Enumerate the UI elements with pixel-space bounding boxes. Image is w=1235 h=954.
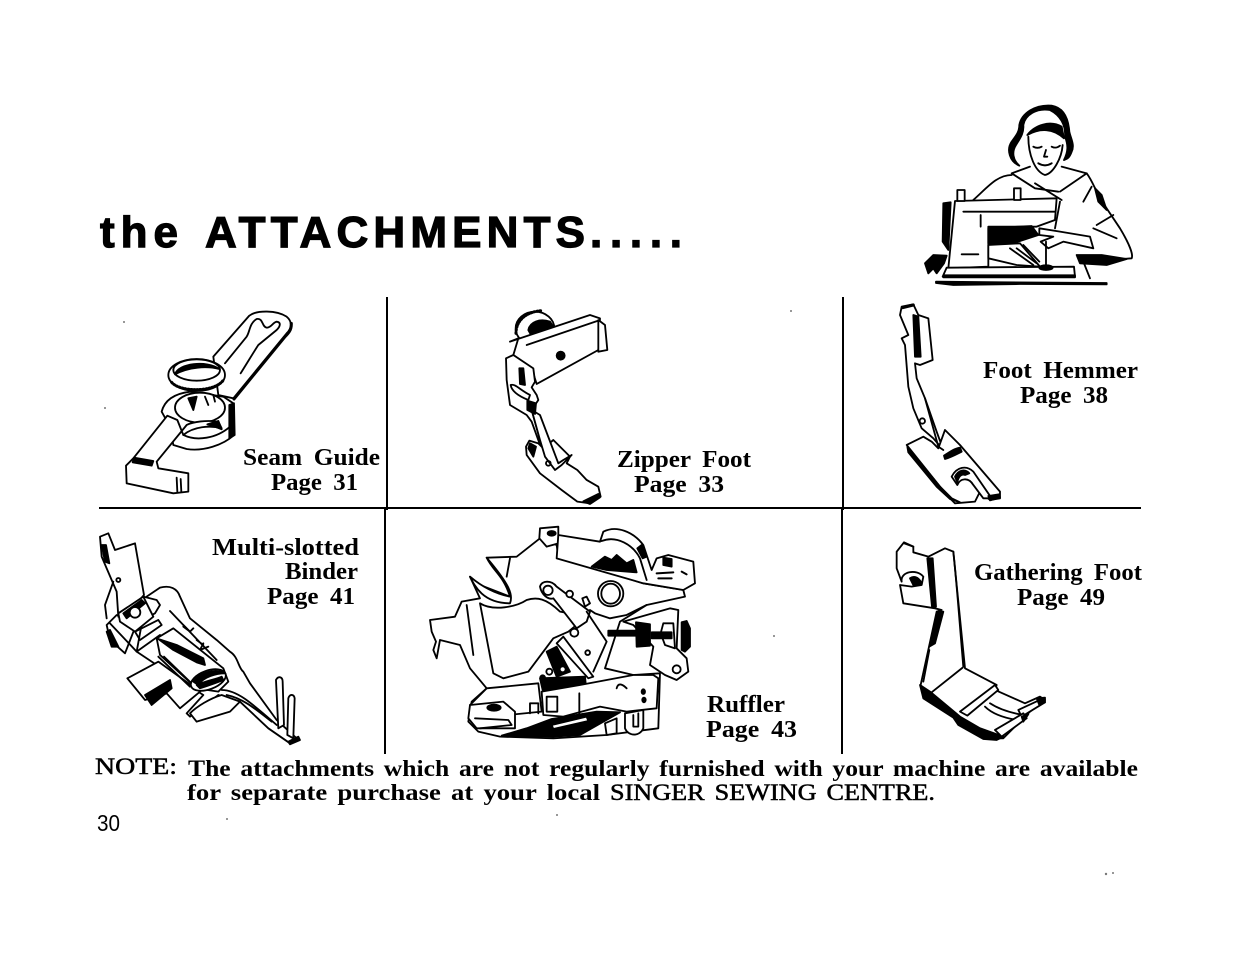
label: foot hemmer: Page 38	[1020, 383, 1108, 409]
label: zipper foot: Page 33	[634, 472, 724, 498]
title	[100, 208, 682, 257]
label: seam guide	[243, 445, 380, 496]
icon: ruffler	[430, 527, 695, 738]
title: the	[100, 208, 178, 257]
label: seam guide: Seam Guide	[243, 445, 380, 471]
panel: seam guide	[126, 312, 380, 496]
icon: seam guide	[126, 312, 291, 493]
icon: zipper foot	[506, 311, 607, 504]
icon: foot hemmer	[900, 304, 1000, 503]
label: zipper foot: Zipper Foot	[617, 447, 751, 473]
label: multi-slotted binder: Binder	[285, 559, 358, 585]
horizontal rule	[99, 507, 1141, 509]
title: .....	[590, 208, 682, 257]
panel: multi-slotted binder	[100, 533, 360, 744]
note text: NOTE:	[95, 754, 177, 779]
label: gathering foot	[974, 560, 1142, 611]
label: foot hemmer: Foot Hemmer	[983, 358, 1138, 384]
label: ruffler: Ruffler	[707, 692, 785, 718]
icon: gathering foot	[897, 542, 1045, 740]
label: foot hemmer	[983, 358, 1138, 409]
icon: woman at sewing machine	[925, 106, 1132, 285]
icon: multi-slotted binder	[100, 533, 300, 744]
label: multi-slotted binder	[212, 535, 360, 610]
label: ruffler	[706, 692, 797, 743]
panel: ruffler	[430, 527, 797, 743]
label: ruffler: Page 43	[706, 717, 797, 743]
label: zipper foot	[617, 447, 751, 498]
label: gathering foot: Page 49	[1017, 585, 1105, 611]
label: multi-slotted binder: Page 41	[267, 584, 355, 610]
note text: for separate purchase at your local	[187, 780, 600, 805]
vertical rule top left	[386, 297, 388, 510]
vertical rule bottom right	[841, 509, 843, 754]
panel: zipper foot	[506, 311, 751, 504]
vertical rule top right	[842, 297, 844, 510]
note text: SINGER SEWING CENTRE.	[610, 780, 935, 805]
title: ATTACHMENTS	[205, 208, 585, 257]
vertical rule bottom left	[384, 509, 386, 754]
panel: foot hemmer	[900, 304, 1138, 503]
panel: gathering foot	[897, 542, 1142, 740]
label: gathering foot: Gathering Foot	[974, 560, 1142, 586]
label: multi-slotted binder: Multi-slotted	[212, 535, 360, 561]
page number: 30	[97, 810, 120, 836]
note text: The attachments which are not regularly furnished with your machine are available	[188, 756, 1138, 781]
label: seam guide: Page 31	[271, 470, 358, 496]
note text	[95, 754, 1138, 805]
